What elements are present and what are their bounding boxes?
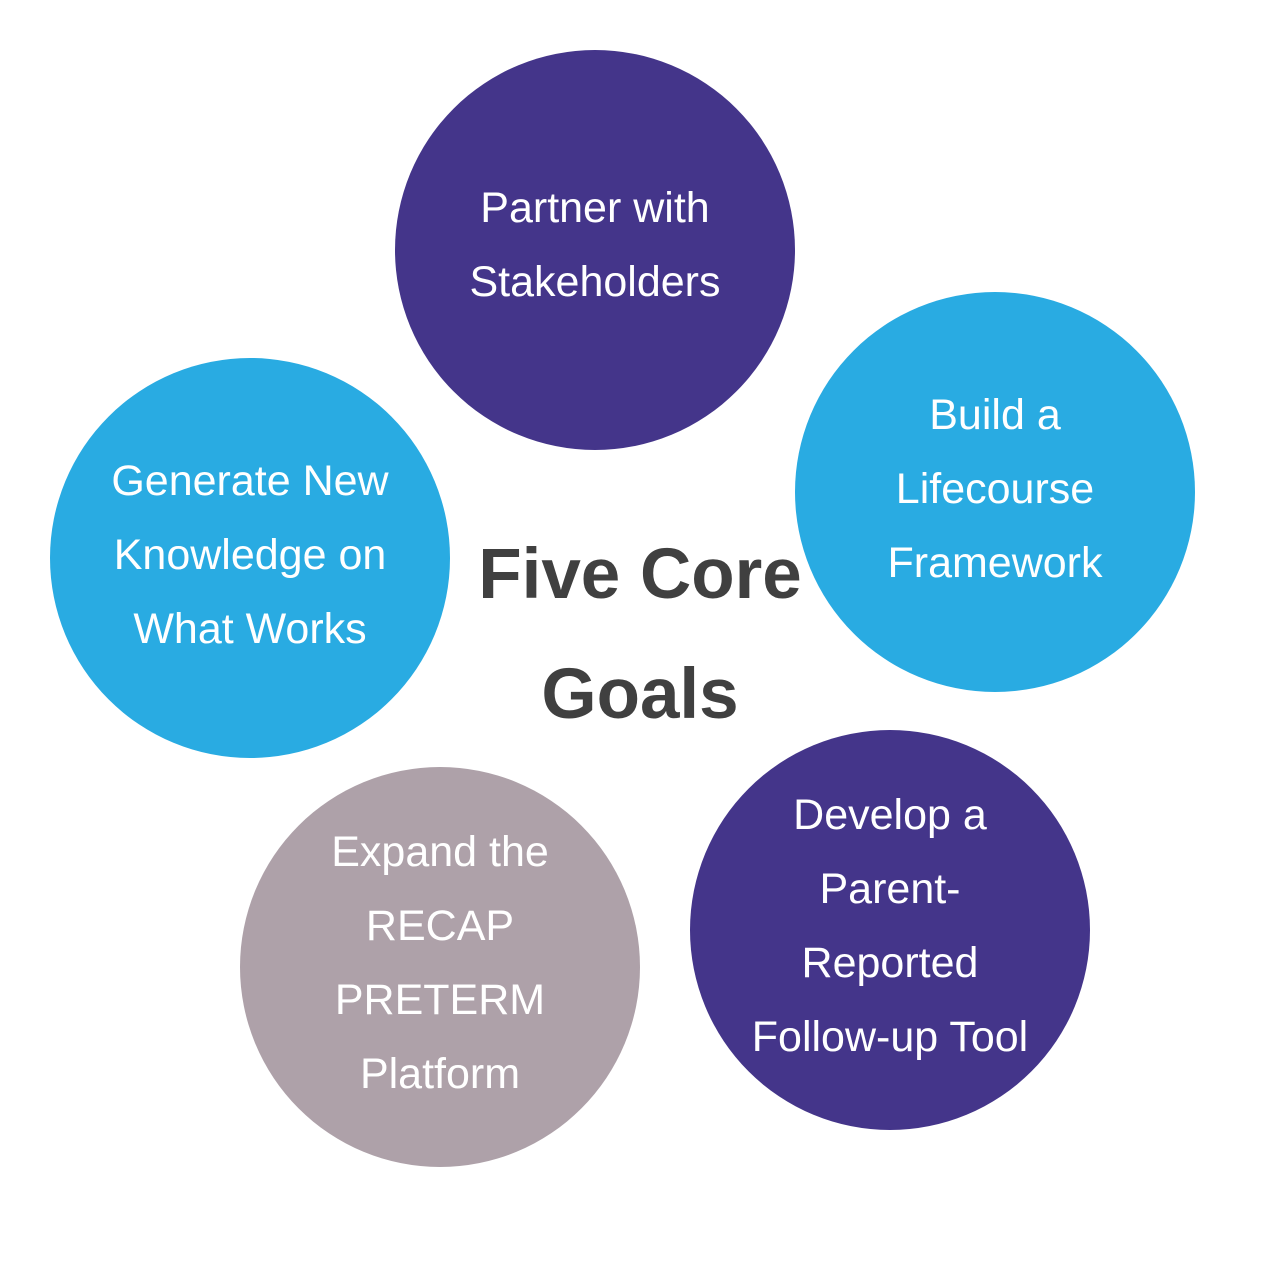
text: build a lifecourse framework: Framework bbox=[887, 539, 1103, 587]
circle: generate new knowledge bbox=[50, 358, 450, 758]
text: generate new knowledge: Knowledge on bbox=[114, 531, 386, 579]
title: Goals bbox=[541, 655, 739, 734]
text: partner with stakeholders: Partner with bbox=[480, 184, 710, 232]
circle: develop parent-reported tool bbox=[690, 730, 1090, 1130]
text: develop parent-reported tool bbox=[752, 791, 1028, 1061]
text: expand RECAP PRETERM platform: RECAP bbox=[366, 902, 514, 950]
title bbox=[478, 535, 802, 734]
text: develop parent-reported tool: Reported bbox=[802, 939, 978, 987]
text: expand RECAP PRETERM platform bbox=[331, 828, 549, 1098]
title: Five Core bbox=[478, 535, 802, 614]
text: generate new knowledge: What Works bbox=[133, 605, 367, 653]
text: develop parent-reported tool: Follow-up Tool bbox=[752, 1013, 1028, 1061]
text: build a lifecourse framework: Lifecourse bbox=[896, 465, 1094, 513]
circle: expand RECAP PRETERM platform bbox=[240, 767, 640, 1167]
text: partner with stakeholders: Stakeholders bbox=[470, 258, 720, 306]
text: develop parent-reported tool: Develop a bbox=[793, 791, 987, 839]
text: expand RECAP PRETERM platform: Platform bbox=[360, 1050, 520, 1098]
text: expand RECAP PRETERM platform: Expand the bbox=[331, 828, 549, 876]
text: generate new knowledge bbox=[111, 457, 389, 653]
text: generate new knowledge: Generate New bbox=[111, 457, 389, 505]
text: expand RECAP PRETERM platform: PRETERM bbox=[335, 976, 545, 1024]
text: develop parent-reported tool: Parent- bbox=[819, 865, 960, 913]
text: build a lifecourse framework bbox=[887, 391, 1103, 587]
text: build a lifecourse framework: Build a bbox=[929, 391, 1061, 439]
circle: build a lifecourse framework bbox=[795, 292, 1195, 692]
text: partner with stakeholders bbox=[470, 184, 720, 306]
circle: partner with stakeholders bbox=[395, 50, 795, 450]
